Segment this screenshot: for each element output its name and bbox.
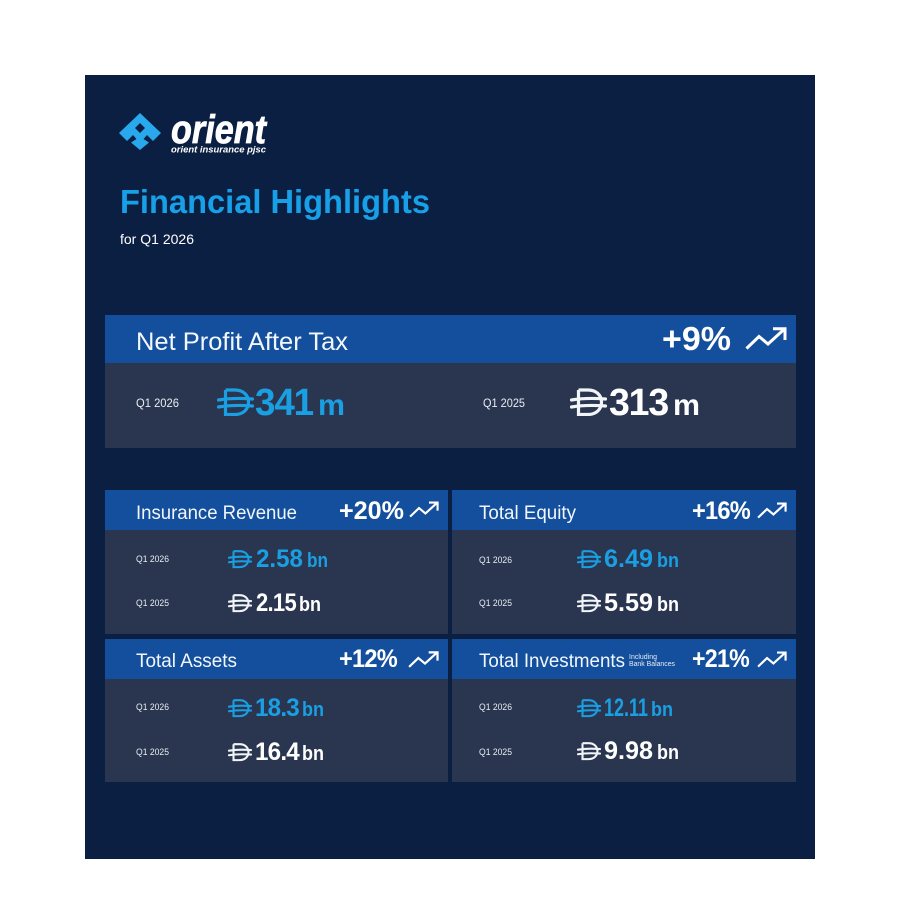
logo tagline: orient insurance pjsc bbox=[171, 144, 266, 154]
panel: net profit after tax bbox=[105, 315, 796, 448]
label: Q1 2025: Q1 2025 bbox=[136, 747, 169, 757]
icon: trend arrow bbox=[409, 652, 438, 667]
label: Q1 2026: Q1 2026 bbox=[479, 702, 512, 712]
label: Q1 2026: Q1 2026 bbox=[136, 702, 169, 712]
value: 5.59 bn: 5.59 bbox=[604, 589, 653, 617]
unit: bn: bn bbox=[657, 742, 679, 764]
value: 341m: 341 bbox=[255, 382, 314, 424]
icon: dirham bbox=[578, 551, 600, 567]
unit: m: m bbox=[673, 389, 700, 422]
icon: orient diamond mark bbox=[119, 113, 161, 150]
subtitle: for Q1 2026 bbox=[120, 231, 194, 247]
unit: bn: bn bbox=[299, 594, 321, 616]
icon: dirham bbox=[578, 743, 600, 759]
note: including bank balances: Bank Balances bbox=[629, 661, 675, 668]
change: +12%: +12% bbox=[339, 645, 398, 673]
value: 18.3 bn: 18.3 bbox=[255, 694, 299, 722]
value: 2.15 bn: 2.15 bbox=[256, 589, 297, 617]
icon: dirham bbox=[218, 390, 252, 414]
panel: total assets bbox=[105, 639, 448, 782]
label: Q1 2026: Q1 2026 bbox=[136, 554, 169, 564]
unit: bn: bn bbox=[307, 550, 328, 572]
unit: bn: bn bbox=[302, 743, 324, 765]
heading: insurance revenue: Insurance Revenue bbox=[136, 503, 297, 524]
unit: bn: bn bbox=[651, 699, 673, 721]
unit: bn: bn bbox=[657, 550, 679, 572]
background panel bbox=[85, 75, 815, 859]
icon: dirham bbox=[578, 700, 600, 716]
unit: bn: bn bbox=[657, 594, 679, 616]
icon: trend arrow bbox=[410, 503, 438, 517]
value: 16.4 bn: 16.4 bbox=[255, 738, 300, 766]
logo wordmark: orient bbox=[171, 108, 267, 152]
value: 9.98 bn: 9.98 bbox=[604, 737, 653, 765]
value: 2.58 bn: 2.58 bbox=[256, 545, 303, 573]
icon: trend arrow bbox=[758, 653, 786, 667]
heading: total equity: Total Equity bbox=[479, 503, 576, 524]
panel: total investments bbox=[452, 639, 796, 782]
icon: dirham bbox=[229, 744, 251, 760]
icon: dirham bbox=[578, 595, 600, 611]
icon: dirham bbox=[229, 700, 251, 716]
logo bbox=[119, 108, 267, 154]
icon: dirham bbox=[229, 595, 251, 611]
note: including bank balances: Including bbox=[629, 654, 657, 661]
heading: net profit: Net Profit After Tax bbox=[136, 328, 348, 356]
unit: bn: bn bbox=[302, 699, 324, 721]
panel: total equity bbox=[452, 490, 796, 634]
unit: m: m bbox=[318, 389, 345, 422]
heading: total investments: Total Investments bbox=[479, 651, 625, 672]
change: +16%: +16% bbox=[692, 497, 751, 525]
value: 6.49 bn: 6.49 bbox=[604, 545, 653, 573]
label: Q1 2025: Q1 2025 bbox=[483, 398, 525, 410]
icon: trend arrow bbox=[758, 504, 786, 518]
change: +9%: +9% bbox=[662, 320, 731, 357]
label: Q1 2025: Q1 2025 bbox=[136, 598, 169, 608]
icon: dirham bbox=[229, 551, 251, 567]
value: 12.11 bn: 12.11 bbox=[604, 694, 648, 722]
heading: total assets: Total Assets bbox=[136, 651, 237, 672]
change: +21%: +21% bbox=[692, 645, 750, 673]
icon: dirham bbox=[572, 390, 606, 414]
label: Q1 2026: Q1 2026 bbox=[136, 398, 179, 410]
label: Q1 2025: Q1 2025 bbox=[479, 598, 512, 608]
icon: trend arrow bbox=[746, 329, 785, 348]
title: Financial Highlights bbox=[120, 183, 430, 220]
panel: insurance revenue bbox=[105, 490, 448, 634]
change: +20%: +20% bbox=[339, 497, 404, 525]
label: Q1 2025: Q1 2025 bbox=[479, 747, 512, 757]
value: 313m: 313 bbox=[609, 382, 668, 424]
label: Q1 2026: Q1 2026 bbox=[479, 555, 512, 565]
